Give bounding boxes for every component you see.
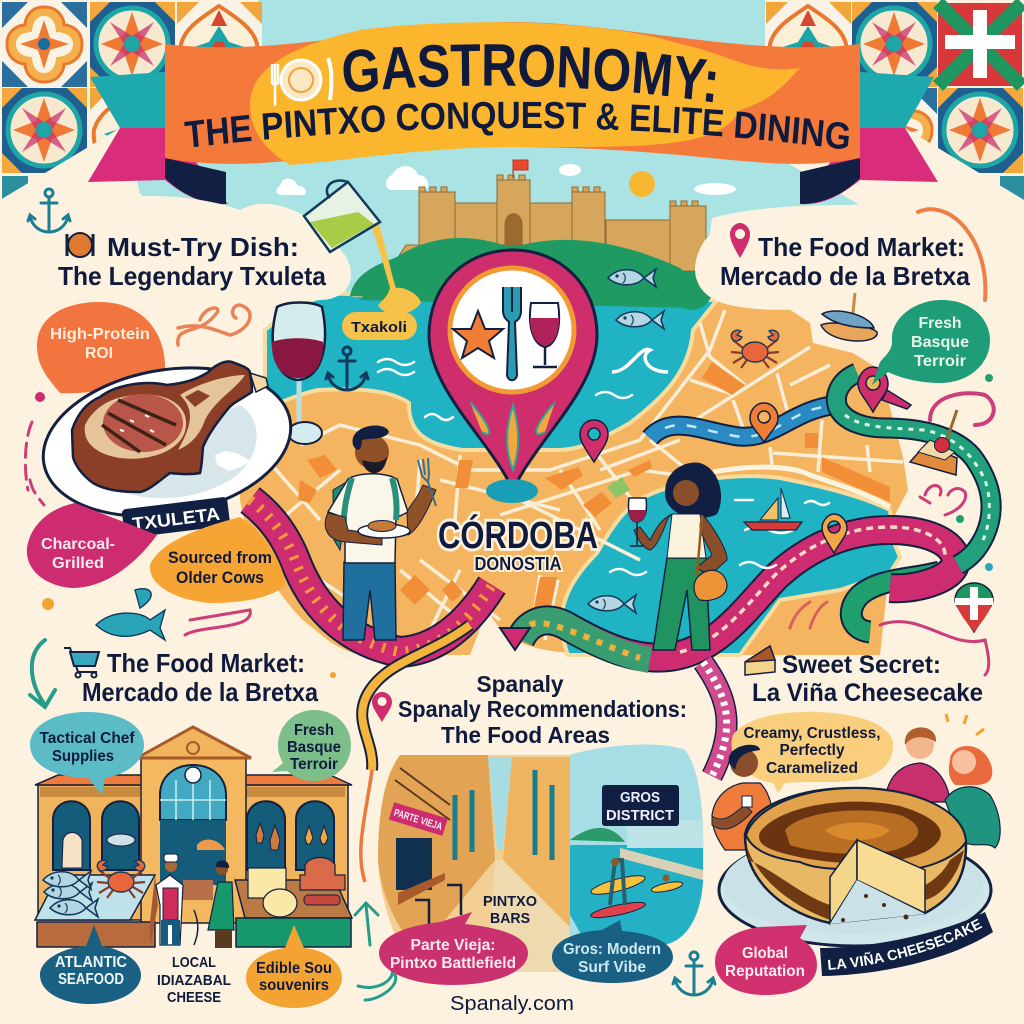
green hills xyxy=(350,223,717,310)
icon: cheesecake slice xyxy=(745,646,775,675)
panel: right tiles xyxy=(766,2,1024,200)
feeder ribbon xyxy=(361,625,470,882)
icon: wave xyxy=(612,349,668,372)
callout: fresh basque terroir top xyxy=(872,300,990,385)
icon: small pin yellow xyxy=(822,514,847,553)
panel: left tiles xyxy=(2,2,262,200)
icon: big map pin xyxy=(429,250,597,490)
left ribbon xyxy=(250,500,492,652)
icon: teal fish left xyxy=(96,589,165,640)
label: local idiazabal cheese: CHEESE xyxy=(167,989,221,1006)
green block xyxy=(607,477,630,498)
callout: parte vieja: Pintxo Battlefield xyxy=(390,955,516,972)
hanging goods xyxy=(62,832,82,868)
bay water xyxy=(265,294,717,450)
callout: fresh basque terroir top: Fresh xyxy=(918,315,962,332)
label: local idiazabal cheese xyxy=(157,910,231,1006)
icon: cart xyxy=(64,648,99,678)
right tail xyxy=(855,72,934,130)
vendor xyxy=(208,882,234,930)
fork xyxy=(503,287,521,380)
callout: high-protein ROI: ROI xyxy=(85,345,113,362)
callout: tactical chef supplies: Tactical Chef xyxy=(40,730,135,747)
heading: food market: Mercado de la Bretxa xyxy=(82,677,318,707)
land map xyxy=(240,295,908,655)
icon: anchor in bay xyxy=(326,347,368,390)
callout: edible souvenirs xyxy=(246,925,342,1008)
illustration: woman with wine xyxy=(628,463,727,650)
left stall xyxy=(35,875,155,920)
heading: recommendations: Spanaly xyxy=(476,671,564,697)
label: gros district xyxy=(602,785,679,826)
heading: recommendations: Spanaly Recommendations: xyxy=(398,696,687,722)
illustration: market building xyxy=(35,727,352,948)
sky xyxy=(130,0,860,300)
left tail xyxy=(90,72,170,130)
dots xyxy=(35,374,993,678)
arches xyxy=(53,801,90,870)
castle xyxy=(395,160,706,271)
heading: sweet secret xyxy=(745,646,983,707)
label: local idiazabal cheese: LOCAL xyxy=(172,954,216,971)
title: GASTRONOMY: xyxy=(344,44,716,102)
icon: fish lower bay xyxy=(588,595,636,613)
heading: must-try dish: Must-Try Dish: xyxy=(107,232,299,262)
right pink ribbon xyxy=(500,527,956,660)
illustration: parte vieja street: BARS xyxy=(490,910,530,927)
title xyxy=(344,44,716,102)
icon: plate xyxy=(67,233,93,257)
label: local idiazabal cheese: IDIAZABAL xyxy=(157,972,231,989)
flag on castle xyxy=(513,160,528,178)
fork xyxy=(418,458,436,506)
arrowhead xyxy=(500,628,530,650)
callout: high-protein ROI: High-Protein xyxy=(50,326,150,343)
wine glass xyxy=(530,303,559,347)
label: TXULETA xyxy=(122,497,230,538)
label: gros district: DISTRICT xyxy=(606,808,674,824)
subtitle: THE PINTXO CONQUEST & ELITE DINING xyxy=(184,102,849,149)
icon: anchor top left xyxy=(28,189,70,232)
zigzag ribbon xyxy=(703,662,727,776)
heading: food market right xyxy=(720,223,971,291)
heading: food market: The Food Market: xyxy=(107,648,305,678)
callout: creamy crustless: Perfectly xyxy=(780,742,845,759)
lower right water xyxy=(562,476,900,655)
icon: basque flag pin xyxy=(955,583,993,632)
woman xyxy=(949,746,992,785)
heading: food market right: Mercado de la Bretxa xyxy=(720,261,971,291)
left title backdrop xyxy=(0,196,351,310)
icon: fish in bay 1 xyxy=(608,269,656,287)
icon: pin xyxy=(372,692,392,722)
label: CÓRDOBA: CÓRDOBA xyxy=(438,513,598,557)
wings xyxy=(38,785,348,920)
callout: edible souvenirs: souvenirs xyxy=(259,977,329,994)
callout: tactical chef supplies xyxy=(30,712,144,795)
awning sign xyxy=(389,802,448,836)
icon: plate and cutlery xyxy=(272,58,331,106)
river ribbon xyxy=(650,405,835,438)
callout: parte vieja: Parte Vieja: xyxy=(410,937,496,954)
decorative lines xyxy=(946,714,984,735)
callout: edible souvenirs: Edible Sou xyxy=(256,960,332,977)
heading: must-try dish xyxy=(58,232,327,291)
right title backdrop xyxy=(695,204,1024,330)
callout: parte vieja xyxy=(379,912,528,985)
illustration: gros surf xyxy=(570,745,703,950)
label: Txakoli xyxy=(342,312,417,340)
icon: wine glass xyxy=(272,302,325,444)
callout: atlantic seafood xyxy=(40,925,141,1004)
awning sign: PARTE VIEJA xyxy=(392,807,444,833)
hills front xyxy=(360,238,702,308)
icon: fish in bay 2 xyxy=(616,311,664,329)
icon: pin xyxy=(730,223,750,258)
icon: cherry pintxo xyxy=(910,410,957,475)
footer: Spanaly.com: Spanaly.com xyxy=(450,993,574,1015)
heading: food market xyxy=(64,648,318,707)
star xyxy=(453,311,503,358)
callout: atlantic seafood: SEAFOOD xyxy=(58,971,124,988)
callout: sourced from older cows: Sourced from xyxy=(168,548,272,567)
heading: recommendations xyxy=(372,671,687,748)
callout: atlantic seafood: ATLANTIC xyxy=(55,954,127,971)
street map xyxy=(250,310,903,660)
callout: fresh basque terroir top: Basque xyxy=(911,334,969,351)
label: TXULETA: TXULETA xyxy=(131,504,221,534)
heading: recommendations: The Food Areas xyxy=(441,722,610,748)
callout: gros modern surf vibe xyxy=(552,920,673,983)
callout text: charcoal-grilled: Grilled xyxy=(52,555,104,572)
callout: global reputation xyxy=(715,925,817,995)
callout text: charcoal-grilled: Charcoal- xyxy=(41,536,115,553)
bag xyxy=(694,570,727,600)
label: gros district: GROS xyxy=(620,790,660,806)
callout: fresh basque terroir: Terroir xyxy=(290,756,338,773)
callout text: charcoal-grilled xyxy=(41,536,115,572)
callout: fresh basque terroir xyxy=(272,710,351,781)
cream corners xyxy=(0,125,1024,300)
icon: crab on map xyxy=(731,330,779,368)
label: pintxo bars: PINTXO xyxy=(483,893,537,910)
decorative squiggles xyxy=(25,209,994,1000)
callout: charcoal-grilled xyxy=(27,503,157,588)
icon: small pin orange xyxy=(750,403,778,442)
callout: global reputation: Reputation xyxy=(725,963,805,980)
pin base xyxy=(486,479,538,503)
illustration: cheesecake xyxy=(719,788,991,946)
glass xyxy=(628,498,646,546)
callout: high-protein ROI xyxy=(37,302,165,393)
heading: must-try dish: The Legendary Txuleta xyxy=(58,261,327,291)
banner tails xyxy=(88,72,938,204)
callout: fresh basque terroir: Basque xyxy=(287,739,341,756)
icon: pitcher of txakoli xyxy=(304,181,421,315)
heading: sweet secret: Sweet Secret: xyxy=(782,651,941,679)
clouds and sun xyxy=(276,164,736,197)
callout: fresh basque terroir: Fresh xyxy=(294,722,334,739)
illustration: parte vieja street xyxy=(378,755,578,972)
cut xyxy=(830,840,857,923)
left man xyxy=(712,783,772,850)
callout: sourced from older cows: Older Cows xyxy=(176,568,264,587)
icon: small pin pink xyxy=(580,420,608,462)
street blocks xyxy=(298,362,890,612)
label: Txakoli: Txakoli xyxy=(351,319,407,336)
label: DONOSTIA: DONOSTIA xyxy=(474,554,562,574)
icon: sailboat xyxy=(744,488,802,530)
callout: global reputation: Global xyxy=(742,945,788,962)
callout: fresh basque terroir top: Terroir xyxy=(914,353,966,370)
center block xyxy=(141,758,246,923)
callout: tactical chef supplies: Supplies xyxy=(52,748,114,765)
right man xyxy=(887,763,950,802)
callout: sourced from older cows xyxy=(150,517,285,603)
callout: gros modern surf vibe: Gros: Modern xyxy=(563,941,661,958)
illustration: man with pintxo xyxy=(325,426,436,640)
callout: creamy crustless xyxy=(731,712,893,793)
heading: sweet secret: La Viña Cheesecake xyxy=(752,679,983,707)
illustration: friends xyxy=(712,714,1000,850)
wave marks xyxy=(378,359,829,575)
callout: gros modern surf vibe: Surf Vibe xyxy=(578,959,646,976)
callout: creamy crustless: Caramelized xyxy=(766,760,858,777)
illustration: txuleta steak xyxy=(31,349,303,535)
right stall xyxy=(235,880,352,918)
icon: anchor bottom xyxy=(673,952,715,995)
icon: small pin magenta xyxy=(858,367,911,412)
icon: fish pintxo xyxy=(821,293,877,341)
banner xyxy=(165,22,860,165)
plate xyxy=(358,524,410,538)
icon: basque flag xyxy=(938,3,1022,86)
label: la viña cheesecake: LA VIÑA CHEESECAKE xyxy=(828,918,982,970)
chef xyxy=(156,875,183,945)
heading: food market right: The Food Market: xyxy=(758,232,965,262)
callout: creamy crustless: Creamy, Crustless, xyxy=(744,725,880,742)
green ribbon xyxy=(836,373,991,565)
